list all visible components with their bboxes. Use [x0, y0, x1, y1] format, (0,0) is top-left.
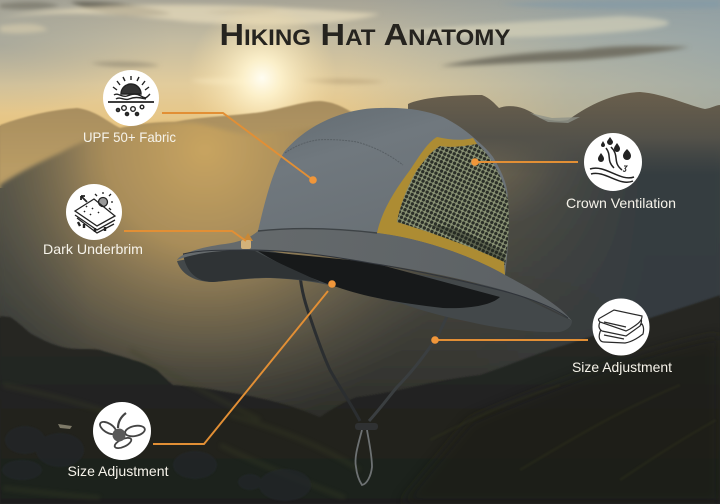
chin cord left: [299, 262, 360, 421]
icon: folded fabric stack: [598, 310, 644, 343]
callout: Dark Underbrim: [43, 184, 143, 257]
callout: UPF 50+ Fabric: [83, 70, 176, 145]
underbrim: [177, 248, 572, 332]
label: UPF 50+ Fabric: [83, 129, 176, 145]
leader: UPF 50+ fabric: [162, 113, 313, 180]
leader: size adjustment left: [153, 291, 328, 444]
brim top surface: [177, 229, 572, 321]
callout: Crown Ventilation: [566, 133, 676, 211]
callout: Size Adjustment left: [68, 402, 169, 479]
brim toggle: [241, 233, 253, 249]
leader: size adjustment right: [436, 339, 588, 341]
title: Hiking Hat Anatomy: [220, 17, 511, 52]
leader: dark underbrim: [124, 231, 246, 241]
cord lock and loop: [355, 423, 378, 485]
hat illustration: [177, 108, 572, 485]
icon: toggle with cord loops: [98, 413, 146, 450]
crown: [258, 108, 509, 275]
dot: fabric: [309, 176, 317, 184]
icon: layered fabric with sun: [75, 192, 115, 233]
callout: Size Adjustment right: [572, 298, 672, 375]
label: Size Adjustment: [572, 359, 672, 375]
icon: drops and air waves: [590, 137, 634, 182]
leader: crown ventilation: [475, 161, 578, 163]
dot: underbrim: [328, 280, 336, 288]
dot: cord: [431, 336, 439, 344]
mesh vent: [397, 144, 509, 265]
dot: vent: [471, 158, 479, 166]
label: Crown Ventilation: [566, 195, 676, 211]
chin cord right: [369, 283, 460, 421]
yellow mesh binding: [377, 137, 505, 275]
label: Size Adjustment: [68, 463, 169, 479]
label: Dark Underbrim: [43, 241, 143, 257]
icon: sun over waves with particles: [108, 76, 154, 116]
leader lines: [124, 113, 588, 444]
underbrim dark shadow: [258, 251, 500, 308]
